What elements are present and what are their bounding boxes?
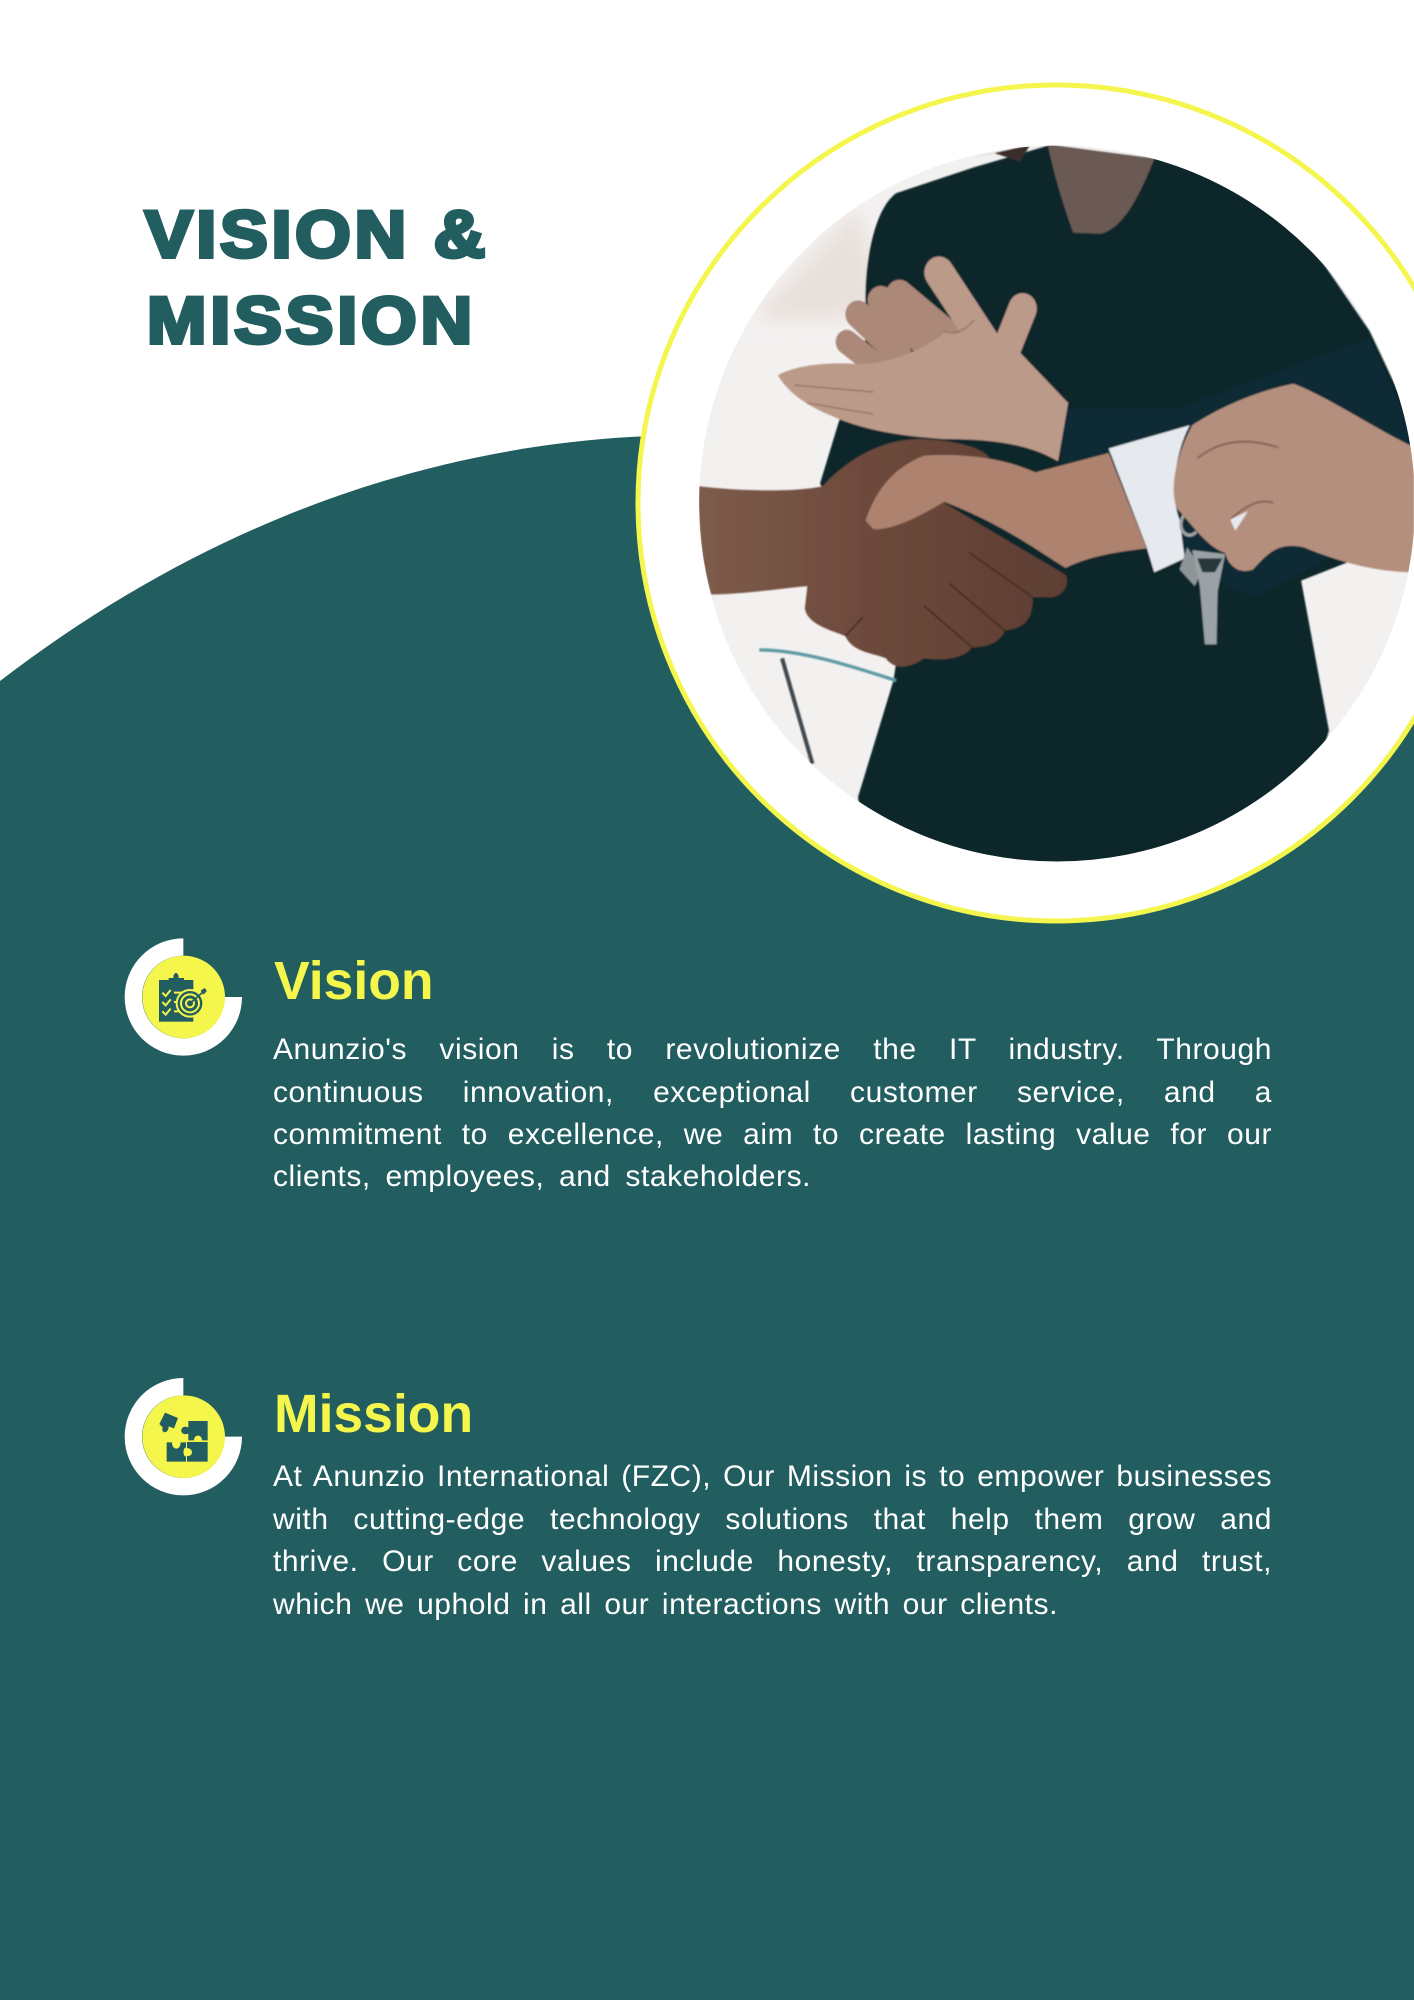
giving hand — [1174, 384, 1414, 572]
clapping hand, front — [778, 273, 1068, 461]
title: VISION & — [145, 197, 485, 271]
text: vision paragraph: commitment to excellence, we aim to create lasting value for our — [273, 1118, 1272, 1151]
blurred background tones — [762, 209, 883, 320]
neck — [1048, 145, 1154, 234]
text: mission paragraph — [273, 1460, 1272, 1621]
man's arm and hand — [698, 439, 1067, 667]
hair — [974, 145, 1030, 162]
text: vision paragraph: clients, employees, and stakeholders. — [273, 1160, 811, 1193]
text: mission paragraph: with cutting-edge technology solutions that help them grow and — [273, 1503, 1272, 1536]
heading: Mission: Mission — [274, 1385, 473, 1444]
chair — [759, 650, 896, 680]
right sleeve — [1061, 338, 1414, 597]
text: vision paragraph — [273, 1033, 1272, 1193]
photo: business handshake with keys — [690, 140, 1414, 902]
woman's forearm and hand — [866, 453, 1147, 568]
text: mission paragraph: At Anunzio International (FZC), Our Mission is to empower businesses — [273, 1460, 1272, 1493]
title — [142, 197, 486, 357]
text: vision paragraph: continuous innovation, exceptional customer service, and a — [273, 1076, 1272, 1109]
text: mission paragraph: thrive. Our core values include honesty, transparency, and trust, — [273, 1545, 1272, 1578]
photo ring with yellow outline — [638, 85, 1414, 921]
teal curved background panel — [0, 436, 1414, 2000]
icon: vision clipboard and target — [124, 938, 242, 1056]
text: mission paragraph: which we uphold in all our interactions with our clients. — [273, 1588, 1058, 1621]
icon: mission puzzle — [124, 1378, 242, 1496]
keys — [1181, 514, 1196, 535]
heading: Vision: Vision — [274, 952, 434, 1011]
woman's suit — [820, 145, 1414, 903]
title: MISSION — [147, 283, 472, 357]
clapping hand, rear fingers — [847, 295, 949, 367]
shirt cuff — [1109, 425, 1190, 572]
text: vision paragraph: Anunzio's vision is to revolutionize the IT industry. Through — [273, 1033, 1272, 1066]
